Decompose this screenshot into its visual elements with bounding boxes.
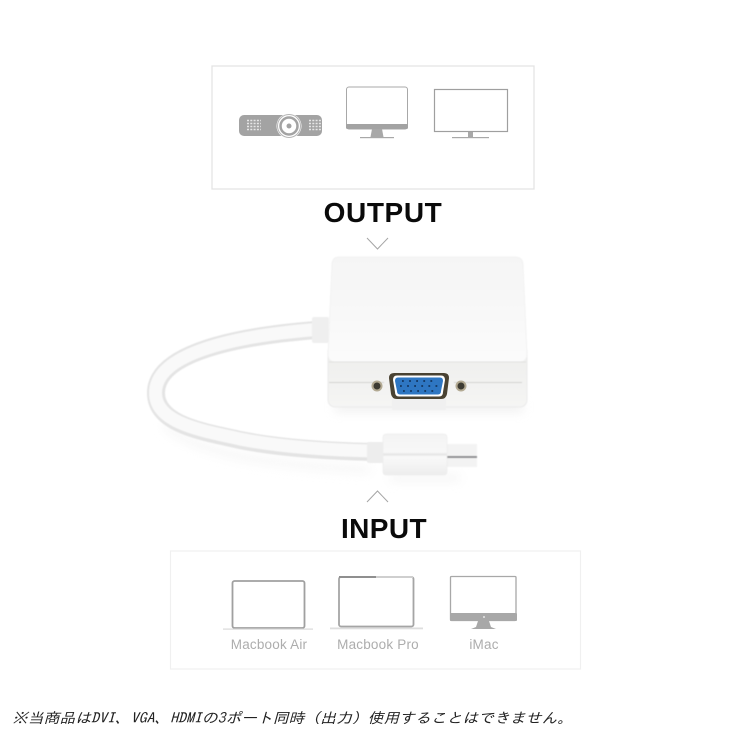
icon: Macbook Pro bbox=[330, 577, 423, 629]
heading: INPUT: INPUT bbox=[341, 513, 427, 544]
arrow: down chevron bbox=[367, 238, 388, 249]
icon: thin monitor bbox=[434, 90, 508, 138]
cable strain relief bbox=[312, 317, 329, 343]
cable bbox=[156, 330, 372, 452]
icon: projector bbox=[239, 114, 322, 138]
icon: Macbook Air bbox=[223, 581, 313, 630]
footnote: ※当商品はDVI、VGA、HDMIの3ポート同時（出力）使用することはできません。 bbox=[12, 710, 573, 725]
heading: OUTPUT: OUTPUT bbox=[324, 197, 442, 228]
icon: iMac bbox=[450, 576, 517, 629]
left screw bbox=[372, 380, 382, 392]
VGA port bbox=[389, 373, 449, 399]
panel: input devices bbox=[170, 551, 580, 669]
panel: output devices bbox=[212, 66, 534, 189]
right screw bbox=[456, 380, 466, 392]
arrow: up chevron bbox=[367, 491, 388, 502]
label: Macbook Pro: Macbook Pro bbox=[337, 637, 419, 652]
shadows bbox=[165, 402, 523, 482]
adapter housing bbox=[328, 257, 527, 410]
mini DisplayPort plug bbox=[367, 434, 477, 475]
adapter product photo bbox=[156, 257, 527, 482]
label: iMac: iMac bbox=[469, 637, 499, 652]
icon: monitor with chin bbox=[346, 87, 408, 138]
label: Macbook Air: Macbook Air bbox=[231, 637, 308, 652]
